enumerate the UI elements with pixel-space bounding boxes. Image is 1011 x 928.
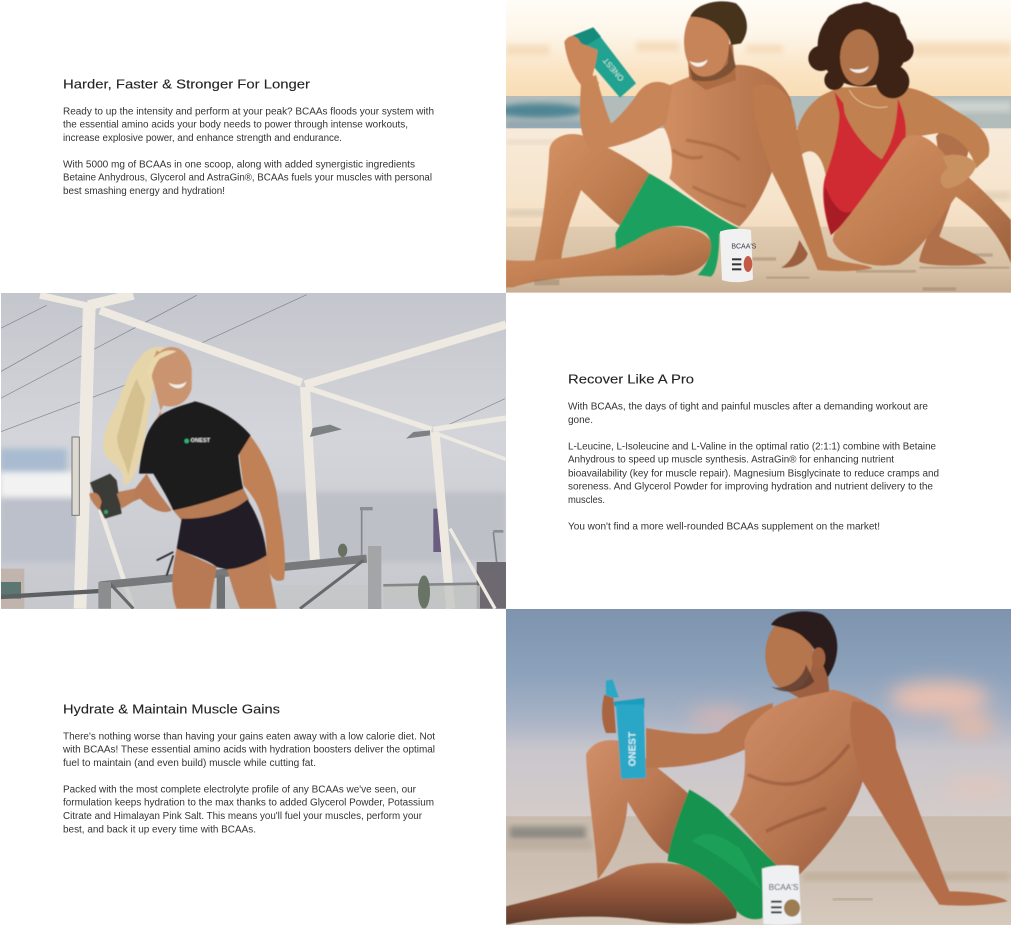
- ponytail: [103, 347, 173, 485]
- teal shaker bottle: [572, 27, 636, 98]
- text block: recovery intro: gone.: [568, 415, 593, 426]
- black shaker: [90, 474, 122, 519]
- panel: Recover Like A Pro copy: [568, 372, 939, 532]
- text block: intro paragraph: increase explosive power, and enhance strength and endurance.: [63, 133, 342, 144]
- distant building: [1, 562, 507, 609]
- text block: ingredient details: muscles.: [568, 495, 605, 506]
- text block: ingredient details: bioavailability (key for muscle repair). Magnesium Bisglycinate to reduce cramps and: [568, 468, 939, 480]
- text block: ingredients paragraph: With 5000 mg of BCAAs in one scoop, along with added synergistic ingredients: [63, 160, 415, 170]
- street lamps and banner: [360, 507, 503, 562]
- text block: ingredients paragraph: best smashing energy and hydration!: [63, 186, 225, 197]
- man: [506, 611, 1008, 925]
- lamp heads: [310, 425, 430, 439]
- text block: intro paragraph: the essential amino acids your body needs to power through intense workouts,: [63, 120, 408, 130]
- white steel pipe structure: [40, 295, 506, 609]
- text block: ingredient details: L-Leucine, L-Isoleucine and L-Valine in the optimal ratio (2:1:1) combine with Betaine: [568, 442, 936, 452]
- dusk sky: [506, 608, 1011, 828]
- foreground sand: [534, 253, 1009, 291]
- woman in red swimsuit: [781, 2, 1011, 268]
- heading: Harder, Faster & Stronger For Longer: Harder, Faster & Stronger For Longer: [63, 76, 311, 92]
- text block: low calorie paragraph: [62, 732, 435, 769]
- text block: intro paragraph: Ready to up the intensity and perform at your peak? BCAAs floods your system with: [63, 106, 434, 118]
- overhead wires: [0, 295, 505, 432]
- man: [506, 1, 873, 287]
- blue shaker bottle: [603, 680, 646, 779]
- BCAAs tub: BCAA'S: [731, 244, 757, 251]
- BCAAs tub: [762, 865, 801, 925]
- cloudy sky: [0, 292, 507, 609]
- BCAAs tub: [720, 229, 757, 282]
- text block: ingredient details: [568, 442, 939, 506]
- text block: low calorie paragraph: There's nothing worse than having your gains eaten away with a low calorie diet. Not: [63, 732, 435, 742]
- ocean: [496, 96, 1011, 130]
- text block: intro paragraph: [63, 106, 434, 144]
- teal shaker bottle: ONEST: [601, 56, 626, 83]
- text block: recovery intro: With BCAAs, the days of tight and painful muscles after a demanding workout are: [568, 402, 928, 412]
- text block: electrolyte paragraph: Packed with the most complete electrolyte profile of any BCAAs we've seen, our: [63, 784, 417, 796]
- blurred sand: [506, 816, 1011, 926]
- text block: electrolyte paragraph: [63, 784, 434, 836]
- text block: recovery intro: [568, 402, 928, 426]
- text block: electrolyte paragraph: Citrate and Himalayan Pink Salt. This means you'll fuel your muscles, perform your: [63, 811, 423, 822]
- panel: Hydrate & Maintain copy: [62, 702, 435, 836]
- text block: low calorie paragraph: fuel to maintain (and even build) muscle while cutting fat.: [63, 758, 316, 769]
- heading: Recover Like A Pro: Recover Like A Pro: [568, 372, 694, 386]
- text block: ingredient details: Anhydrous to speed up muscle synthesis. AstraGin® for enhancing nutrient: [568, 454, 894, 466]
- wet sand: [506, 128, 1011, 230]
- panel: man with blue shaker photo: [506, 608, 1011, 926]
- sunset sky: [506, 0, 1011, 100]
- woman in black crop top: [89, 347, 285, 609]
- heading: Hydrate & Maintain Muscle Gains: Hydrate & Maintain Muscle Gains: [63, 702, 281, 716]
- metal fence: [0, 544, 480, 609]
- text block: ingredients paragraph: [63, 160, 432, 197]
- blue shaker bottle: ONEST: [627, 732, 638, 766]
- shirt logo: ONEST: [191, 438, 211, 444]
- text block: closing line: You won't find a more well-rounded BCAAs supplement on the market!: [568, 522, 880, 532]
- text block: electrolyte paragraph: best, and back it up every time with BCAAs.: [63, 824, 256, 836]
- curly hair: [808, 2, 914, 98]
- panel: woman at waterfront photo: [0, 292, 507, 609]
- panel: beach couple photo: [496, 0, 1011, 293]
- text block: ingredients paragraph: Betaine Anhydrous, Glycerol and AstraGin®, BCAAs fuels your muscles with personal: [63, 172, 432, 184]
- text block: electrolyte paragraph: formulation keeps hydration to the max thanks to added Glycerol Powder, Potassium: [63, 798, 434, 808]
- panel: Harder, Faster & Stronger copy: [63, 76, 434, 197]
- text block: low calorie paragraph: with BCAAs! These essential amino acids with hydration boosters deliver the optimal: [62, 744, 435, 756]
- dry sand: [506, 227, 1011, 293]
- BCAAs tub: BCAA'S: [769, 882, 799, 892]
- text block: ingredient details: soreness. And Glycerol Powder for improving hydration and nutrient delivery to the: [568, 482, 933, 492]
